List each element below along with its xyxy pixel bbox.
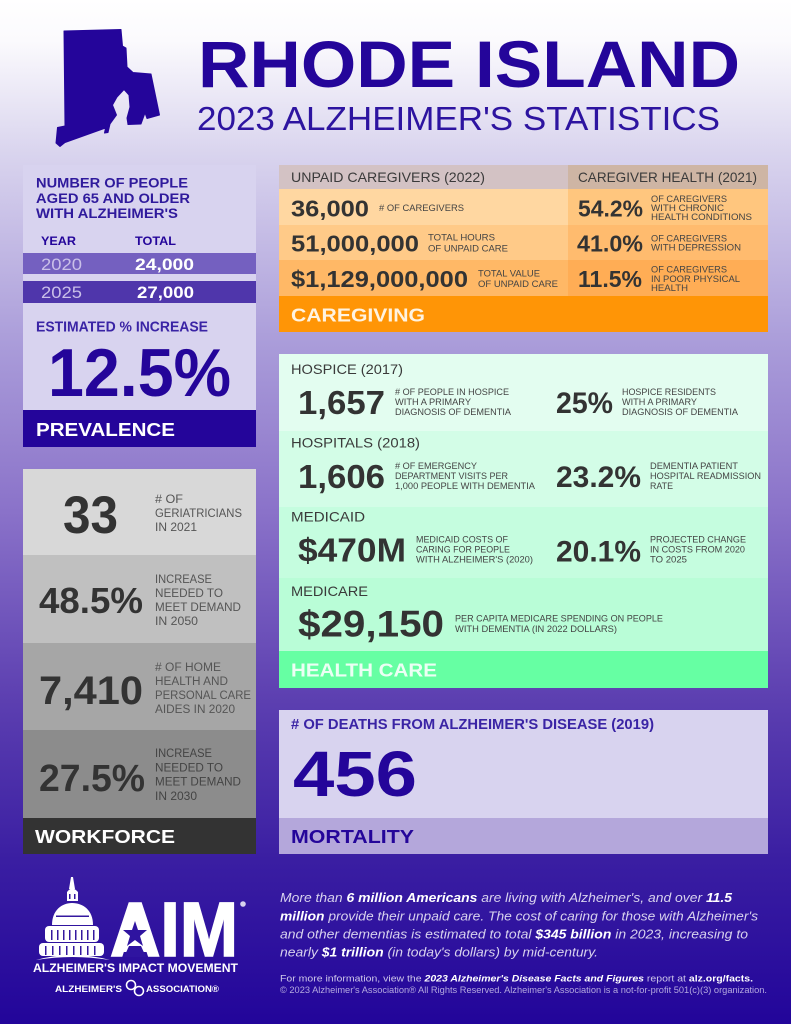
stat: home health aides: HEALTH AND (155, 676, 228, 688)
stat: home health aides: 7,410 (39, 669, 143, 713)
stat: people in hospice: DIAGNOSIS OF DEMENTIA (395, 407, 512, 418)
logo tagline: ALZHEIMER'S IMPACT MOVEMENT (33, 961, 239, 975)
stat: poor physical health: 11.5% (578, 266, 642, 292)
stat: hours of unpaid care: 51,000,000 (291, 231, 419, 257)
stat: people in hospice (298, 384, 512, 421)
stat: geriatricians (63, 486, 242, 545)
caregiving banner (279, 296, 768, 332)
stat: increase needed 2030: MEET DEMAND (155, 776, 241, 788)
title (197, 27, 740, 137)
table row 2025: 27,000 (137, 284, 194, 302)
stat: medicare spending: PER CAPITA MEDICARE SPENDING ON PEOPLE (455, 614, 663, 625)
stat: depression: 41.0% (577, 231, 643, 257)
prevalence banner (23, 410, 256, 447)
stat: projected change: IN COSTS FROM 2020 (650, 544, 745, 556)
table header: YEAR (41, 234, 76, 248)
text block: summary paragraph: million provide their unpaid care. The cost of caring for those with Alzheimer's (280, 910, 758, 924)
prevalence heading (36, 176, 190, 221)
stat: hours of unpaid care (291, 231, 508, 257)
stat: projected change: PROJECTED CHANGE (650, 534, 746, 546)
heading: caregiver health: CAREGIVER HEALTH (2021) (578, 169, 757, 185)
estimated increase label: ESTIMATED % INCREASE (36, 318, 208, 336)
heading: medicaid: MEDICAID (291, 509, 365, 525)
stat: people in hospice: WITH A PRIMARY (395, 397, 472, 408)
stat: home health aides: PERSONAL CARE (155, 690, 251, 702)
caregiving banner: CAREGIVING (291, 305, 425, 326)
stat: projected change: TO 2025 (650, 555, 687, 566)
stat: medicaid costs: $470M (298, 532, 406, 569)
stat: number of caregivers (291, 196, 464, 222)
stat: depression: OF CAREGIVERS (651, 234, 727, 245)
text block: summary paragraph: nearly $1 trillion (in today's dollars) by mid-century. (280, 946, 598, 960)
panel: mortality (279, 710, 768, 854)
stat: readmission rate: DEMENTIA PATIENT (650, 461, 738, 472)
stat: readmission rate (556, 461, 761, 494)
table row 2020: 24,000 (135, 256, 194, 274)
heading: hospice: HOSPICE (2017) (291, 361, 403, 377)
heading: unpaid caregivers: UNPAID CAREGIVERS (2022) (291, 169, 485, 185)
registered mark (240, 901, 246, 907)
stat: value of unpaid care: OF UNPAID CARE (478, 279, 558, 290)
stat: hospice residents: DIAGNOSIS OF DEMENTIA (622, 407, 739, 418)
panel: workforce (23, 469, 256, 854)
table row 2020: 2020 (41, 256, 82, 274)
stat: emergency visits: 1,606 (298, 458, 385, 495)
stat: home health aides (39, 662, 251, 716)
estimated increase value: 12.5% (48, 335, 231, 411)
stat: poor physical health: IN POOR PHYSICAL (651, 274, 740, 285)
stat: increase needed 2050 (39, 574, 241, 628)
heading: medicare: MEDICARE (291, 583, 368, 599)
stat: projected change: 20.1% (556, 536, 641, 569)
stat: hours of unpaid care: OF UNPAID CARE (428, 243, 508, 254)
stat: chronic conditions: WITH CHRONIC (651, 203, 724, 214)
stat: emergency visits: DEPARTMENT VISITS PER (395, 471, 508, 482)
stat: medicaid costs: WITH ALZHEIMER'S (2020) (416, 555, 533, 566)
stat: value of unpaid care (291, 266, 558, 292)
panel: health care (279, 354, 768, 688)
stat: emergency visits: # OF EMERGENCY (395, 461, 478, 472)
stat: chronic conditions: OF CAREGIVERS (651, 194, 727, 205)
stat: poor physical health: HEALTH (651, 283, 688, 294)
stat: poor physical health: OF CAREGIVERS (651, 264, 727, 276)
table row 2020 (23, 253, 256, 274)
stat: readmission rate: RATE (650, 481, 673, 492)
text block: footer credits: © 2023 Alzheimer's Association® All Rights Reserved. Alzheimer's Association is a not-for-profit 501(c)(3) organization. (280, 985, 767, 995)
icon: capitol dome (36, 877, 110, 960)
stat: chronic conditions: HEALTH CONDITIONS (651, 212, 752, 223)
health care banner (279, 651, 768, 688)
stat: number of caregivers: # OF CAREGIVERS (379, 203, 464, 214)
stat: increase needed 2030: NEEDED TO (155, 762, 223, 774)
table header (41, 234, 176, 248)
stat: chronic conditions (578, 194, 752, 223)
stat: medicare spending: $29,150 (298, 604, 444, 645)
workforce banner (23, 818, 256, 854)
prevalence banner: PREVALENCE (36, 419, 175, 440)
stat: increase needed 2050: INCREASE (155, 574, 212, 586)
stat: depression: WITH DEPRESSION (651, 242, 741, 254)
stat: depression (577, 231, 741, 257)
text block: footer credits: For more information, view the 2023 Alzheimer's Disease Facts and Figures report at alz.org/facts. (280, 974, 753, 985)
association wordmark: ASSOCIATION® (146, 984, 219, 994)
stat: poor physical health (578, 264, 740, 294)
stat: increase needed 2050: IN 2050 (155, 616, 198, 628)
stat: geriatricians: 33 (63, 486, 118, 545)
stat: medicaid costs: MEDICAID COSTS OF (416, 534, 508, 546)
stat: home health aides: AIDES IN 2020 (155, 704, 235, 716)
stat: chronic conditions: 54.2% (578, 196, 643, 222)
association wordmark (55, 980, 219, 996)
stat: readmission rate: 23.2% (556, 461, 641, 494)
stat: projected change (556, 534, 746, 569)
mortality banner (279, 818, 768, 854)
association wordmark: ALZHEIMER'S (55, 984, 122, 994)
stat: increase needed 2030: INCREASE (155, 748, 212, 760)
stat: value of unpaid care: $1,129,000,000 (291, 266, 468, 292)
stat: geriatricians: # OF (155, 494, 183, 506)
table header: TOTAL (135, 234, 176, 248)
stat: hospice residents: WITH A PRIMARY (622, 397, 698, 408)
stat: hospice residents (556, 387, 739, 420)
stat: increase needed 2030 (39, 748, 241, 803)
table row 2025: 2025 (41, 284, 82, 302)
stat: increase needed 2050: NEEDED TO (155, 588, 223, 600)
mortality banner: MORTALITY (291, 826, 415, 847)
text block: summary paragraph: and other dementias is estimated to total $345 billion in 2023, increasing to (280, 928, 748, 942)
stat: hospice residents: 25% (556, 387, 613, 420)
workforce banner: WORKFORCE (35, 826, 175, 847)
stat: emergency visits (298, 458, 536, 495)
stat: number of caregivers: 36,000 (291, 196, 369, 222)
stat: value of unpaid care: TOTAL VALUE (478, 269, 540, 280)
stat: medicaid costs: CARING FOR PEOPLE (416, 544, 510, 556)
logo: Alzheimer's Impact Movement (33, 877, 246, 996)
prevalence heading: WITH ALZHEIMER'S (36, 206, 178, 221)
text block: summary paragraph: More than 6 million Americans are living with Alzheimer's, and over 11.5 (280, 891, 733, 905)
icon: star in A (116, 905, 154, 957)
stat: medicare spending: WITH DEMENTIA (IN 2022 DOLLARS) (455, 624, 617, 635)
heading: hospitals: HOSPITALS (2018) (291, 434, 420, 450)
stat: geriatricians: GERIATRICIANS (155, 508, 242, 520)
panel: prevalence (23, 165, 256, 447)
health care banner: HEALTH CARE (291, 660, 437, 681)
prevalence heading: AGED 65 AND OLDER (36, 191, 190, 206)
text block: summary paragraph (280, 891, 758, 960)
title: RHODE ISLAND (198, 27, 740, 101)
stat: people in hospice: 1,657 (298, 384, 385, 421)
stat: increase needed 2050: MEET DEMAND (155, 602, 241, 614)
stat: medicare spending (298, 604, 663, 645)
AIM wordmark: AIM (110, 887, 238, 973)
title: 2023 ALZHEIMER'S STATISTICS (197, 100, 720, 137)
table row 2025 (23, 281, 256, 303)
stat: hours of unpaid care: TOTAL HOURS (428, 233, 495, 244)
deaths value: 456 (293, 738, 417, 810)
stat: increase needed 2050: 48.5% (39, 580, 143, 621)
panel: caregiving (279, 165, 768, 332)
stat: medicaid costs (298, 532, 533, 569)
stat: increase needed 2030: 27.5% (39, 758, 145, 800)
prevalence heading: NUMBER OF PEOPLE (36, 176, 188, 190)
stat: hospice residents: HOSPICE RESIDENTS (622, 387, 716, 398)
stat: emergency visits: 1,000 PEOPLE WITH DEMENTIA (395, 481, 536, 492)
text block: footer credits (280, 974, 767, 995)
stat: increase needed 2030: IN 2030 (155, 791, 197, 803)
icon: Rhode Island state map (56, 30, 160, 146)
stat: people in hospice: # OF PEOPLE IN HOSPICE (395, 387, 509, 398)
stat: geriatricians: IN 2021 (155, 522, 197, 534)
mortality heading: # OF DEATHS FROM ALZHEIMER'S DISEASE (2019) (291, 717, 654, 733)
stat: readmission rate: HOSPITAL READMISSION (650, 471, 761, 482)
stat: home health aides: # OF HOME (155, 662, 221, 674)
